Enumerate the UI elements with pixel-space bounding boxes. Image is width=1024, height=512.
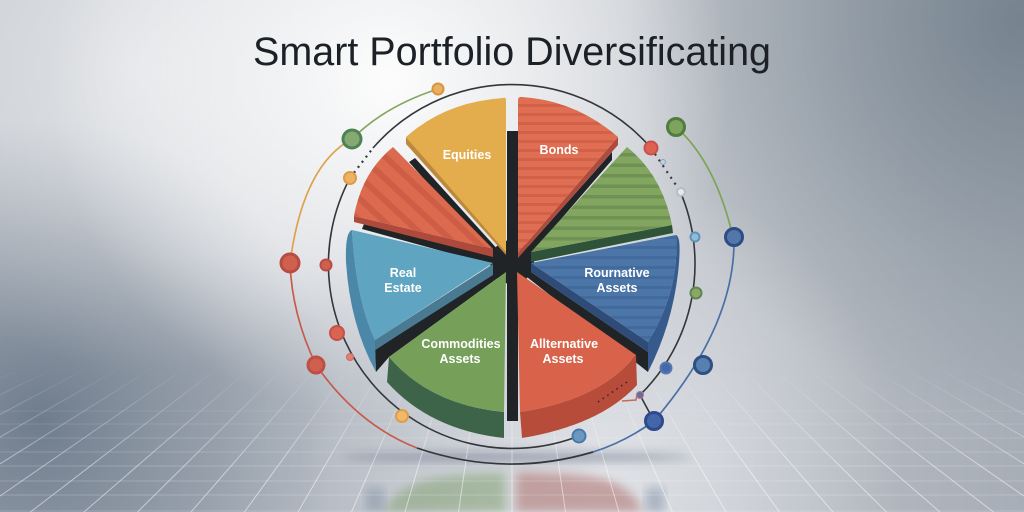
node: red upper right <box>644 142 658 154</box>
connector: red hook <box>622 394 637 401</box>
node: red far left <box>281 254 299 272</box>
slice: real estate: Real <box>390 266 416 280</box>
node: orange upper left <box>344 172 356 184</box>
slice: striped green <box>531 147 673 262</box>
node: orange bottom <box>396 410 408 422</box>
perspective floor grid <box>0 379 1024 512</box>
ground shadow and reflection <box>341 452 691 512</box>
slice: striped red <box>354 147 493 257</box>
node: dark blue lower right <box>646 412 662 430</box>
node: blue far right <box>726 228 742 246</box>
node: red inner left <box>320 260 332 270</box>
slice: real estate: Estate <box>384 281 422 295</box>
slice: bonds: Bonds <box>540 143 578 157</box>
slice: commodities assets <box>387 272 506 438</box>
orbit nodes <box>281 84 742 442</box>
slice: alternative assets: Allternative <box>530 337 598 351</box>
node: green top left <box>343 130 361 148</box>
slice: equities <box>406 98 506 255</box>
pie chart <box>346 97 680 438</box>
slice: rournative assets <box>531 235 680 372</box>
slice: rournative assets: Rournative <box>584 266 650 280</box>
inner orbit ring <box>328 85 695 448</box>
node: tiny blue red <box>636 392 644 398</box>
node: red outer lower left <box>308 357 324 373</box>
slice: alternative assets <box>517 272 637 438</box>
slice: alternative assets: Assets <box>542 352 584 366</box>
title: Smart Portfolio Diversificating <box>253 30 771 74</box>
node: tiny blue <box>660 160 666 164</box>
node: blue outer right <box>694 356 712 374</box>
slice: commodities assets: Commodities <box>421 337 501 351</box>
node: silver <box>677 188 685 196</box>
node: blue inner right <box>660 362 672 374</box>
node: light blue right <box>690 232 700 242</box>
node: green upper right <box>668 118 684 136</box>
slice: bonds <box>518 97 618 258</box>
outer orbit ring <box>290 89 734 464</box>
node: blue bottom <box>572 430 586 442</box>
slice: real estate <box>346 230 493 372</box>
slice: equities: Equities <box>443 148 491 162</box>
slice: commodities assets: Assets <box>440 352 481 366</box>
slice: rournative assets: Assets <box>596 281 638 295</box>
node: green right <box>690 288 702 298</box>
dark hub and spine <box>362 131 648 421</box>
node: orange top <box>432 84 444 94</box>
node: red lower left <box>330 326 344 340</box>
node: small red <box>346 354 354 360</box>
